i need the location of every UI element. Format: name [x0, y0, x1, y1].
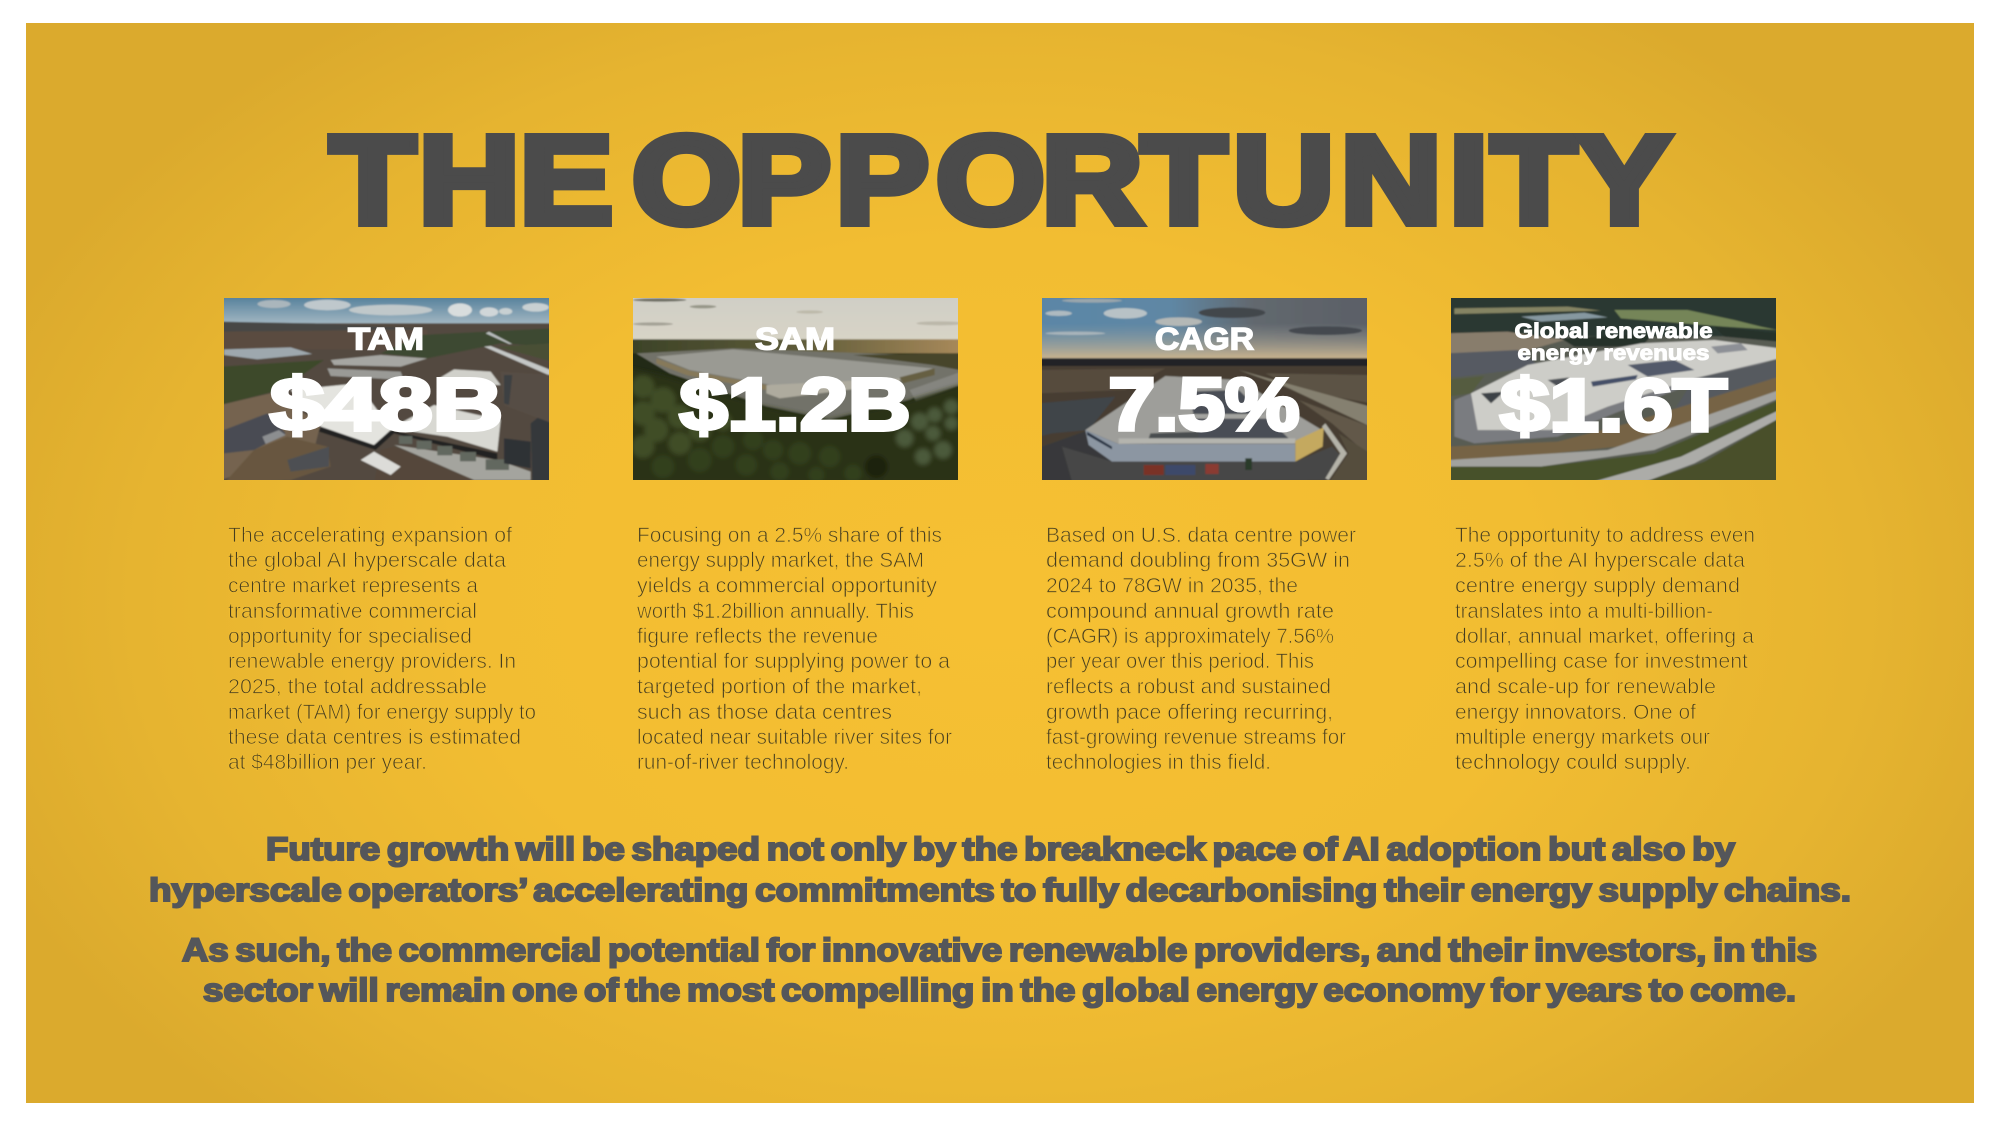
label: Global renewable energy revenues — [1514, 320, 1712, 365]
text block: global revenues description: 2.5% of the AI hyperscale data — [1455, 549, 1745, 572]
text block: SAM description: worth $1.2billion annually. This — [636, 600, 914, 623]
text block: future growth statement: Future growth will be shaped not only by the breakneck pace of AI adoption but also by — [266, 831, 1735, 867]
text block: global revenues description: dollar, annual market, offering a — [1455, 625, 1754, 648]
text block: SAM description: figure reflects the revenue — [637, 625, 878, 648]
text block: CAGR description: (CAGR) is approximately 7.56% — [1046, 625, 1334, 648]
text block: CAGR description: fast-growing revenue streams for — [1046, 726, 1346, 749]
text block: CAGR description: 2024 to 78GW in 2035, the — [1046, 574, 1298, 598]
text block: SAM description: such as those data centres — [637, 701, 892, 724]
text block: TAM description: the global AI hyperscale data — [228, 549, 506, 572]
text block: CAGR description: compound annual growth rate — [1046, 600, 1334, 623]
text block: TAM description: market (TAM) for energy supply to — [228, 701, 536, 724]
text block: TAM description: these data centres is estimated — [228, 726, 521, 749]
text block: TAM description: renewable energy providers. In — [228, 650, 516, 673]
text block: SAM description: located near suitable river sites for — [637, 726, 952, 749]
text block: future growth statement: hyperscale operators’ accelerating commitments to fully decarbonising their energy supply chains. — [149, 872, 1851, 908]
text block: CAGR description: growth pace offering recurring, — [1046, 701, 1333, 724]
text block: future growth statement — [149, 831, 1851, 908]
text block: global revenues description: energy innovators. One of — [1455, 701, 1696, 724]
text block: CAGR description — [1046, 524, 1356, 774]
text block: SAM description: targeted portion of the market, — [637, 676, 922, 698]
text block: TAM description: 2025, the total addressable — [228, 676, 487, 698]
photo: data centre at dusk — [1039, 295, 1370, 483]
text block: CAGR description: per year over this period. This — [1046, 650, 1314, 673]
text block: commercial potential statement: sector will remain one of the most compelling in the global energy economy for years to come. — [203, 972, 1796, 1008]
title: THE OPPORTUNITY — [330, 111, 1671, 250]
value: $48B: $48B — [270, 363, 503, 446]
text block: global revenues description — [1455, 524, 1755, 774]
label: CAGR: CAGR — [1155, 320, 1254, 356]
text block: TAM description: transformative commercial — [228, 600, 477, 623]
panel: TAM image card — [221, 295, 552, 483]
text block: CAGR description: technologies in this field. — [1046, 751, 1271, 774]
text block: global revenues description: multiple energy markets our — [1455, 726, 1710, 749]
text block: global revenues description: technology could supply. — [1455, 751, 1691, 774]
label: Global renewable energy revenues: energy revenues — [1518, 342, 1710, 365]
label: SAM: SAM — [755, 320, 835, 356]
photo: large facility beside motorway — [1448, 295, 1779, 483]
text block: SAM description: potential for supplying power to a — [637, 650, 950, 673]
photo: warehouse in forest at sunset — [630, 295, 963, 483]
text block: commercial potential statement: As such, the commercial potential for innovative renewable providers, and their investors, in this — [182, 932, 1817, 968]
value: $1.2B: $1.2B — [680, 363, 910, 446]
text block: CAGR description: demand doubling from 35GW in — [1046, 549, 1350, 572]
text block: commercial potential statement — [182, 932, 1817, 1008]
text block: TAM description: opportunity for specialised — [228, 625, 472, 648]
panel: CAGR image card — [1039, 295, 1370, 483]
text block: SAM description: run-of-river technology. — [637, 751, 849, 774]
label: TAM: TAM — [348, 320, 424, 356]
text block: global revenues description: compelling case for investment — [1455, 650, 1748, 673]
photo: data centre under blue sky — [221, 295, 552, 483]
text block: CAGR description: reflects a robust and sustained — [1046, 676, 1331, 698]
value: $1.6T: $1.6T — [1500, 364, 1727, 447]
text block: SAM description: energy supply market, the SAM — [637, 549, 924, 572]
text block: global revenues description: centre energy supply demand — [1455, 574, 1740, 598]
text block: SAM description: Focusing on a 2.5% share of this — [637, 524, 942, 547]
text block: TAM description: centre market represents a — [228, 574, 478, 598]
panel: SAM image card — [630, 295, 963, 483]
value: 7.5%: 7.5% — [1108, 363, 1300, 446]
text block: TAM description — [228, 524, 536, 774]
text block: CAGR description: Based on U.S. data centre power — [1046, 524, 1356, 547]
text block: SAM description — [636, 524, 952, 774]
text block: global revenues description: translates into a multi-billion- — [1455, 600, 1713, 623]
text block: TAM description: at $48billion per year. — [228, 751, 427, 774]
text block: TAM description: The accelerating expansion of — [228, 524, 512, 547]
text block: SAM description: yields a commercial opportunity — [637, 574, 938, 598]
label: Global renewable energy revenues: Global renewable — [1514, 320, 1712, 343]
panel: Global renewable energy revenues image card — [1448, 295, 1779, 483]
text block: global revenues description: and scale-up for renewable — [1455, 676, 1716, 698]
text block: global revenues description: The opportunity to address even — [1455, 524, 1755, 547]
